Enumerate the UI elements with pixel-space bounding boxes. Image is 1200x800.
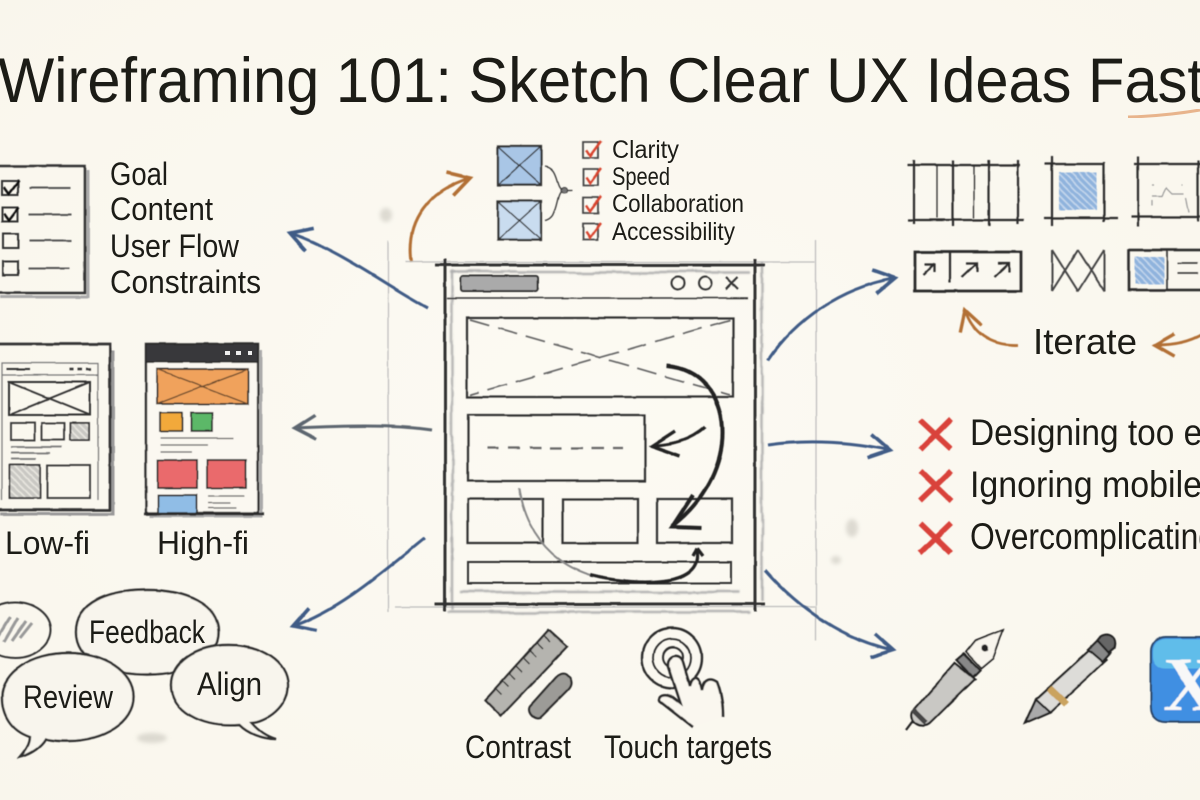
align bubble: Align xyxy=(197,666,262,702)
benefit labels: Accessibility xyxy=(612,218,735,246)
marker pen icon xyxy=(1025,635,1115,723)
touch icon xyxy=(642,628,723,727)
checklist sheet icon xyxy=(0,166,88,297)
title underline accent xyxy=(1128,110,1200,117)
arrow: to feedback xyxy=(293,538,425,626)
mistake labels xyxy=(970,412,1200,557)
smudges xyxy=(137,208,858,743)
benefits icon group xyxy=(498,136,744,246)
wireframe thumbnail icons xyxy=(498,146,572,240)
panel: touch targets xyxy=(604,628,772,765)
grid variations xyxy=(908,156,1200,291)
benefit labels: Speed xyxy=(612,163,670,191)
feedback bubble: Feedback xyxy=(89,614,206,650)
iterate arrow left xyxy=(965,310,1018,345)
footer bar placeholder xyxy=(468,562,731,583)
feedback bubble xyxy=(76,590,219,675)
benefit labels: Clarity xyxy=(612,136,679,164)
checklist labels: Goal xyxy=(110,156,168,192)
red crosses xyxy=(920,419,951,553)
panel: feedback bubbles xyxy=(0,590,288,757)
review bubble xyxy=(2,653,134,757)
arrow: to mistakes xyxy=(768,442,890,450)
panel: tools xyxy=(906,630,1200,730)
flow arrows xyxy=(519,366,723,582)
text block placeholder xyxy=(468,415,645,481)
arrow: to fidelity xyxy=(295,426,432,430)
iterate arrow right xyxy=(1155,333,1200,345)
arrow: to tools xyxy=(765,570,893,650)
card placeholders xyxy=(468,499,732,543)
title bar xyxy=(447,276,748,298)
eraser xyxy=(529,673,572,718)
panel: high-fi wireframe xyxy=(144,344,264,561)
fountain pen icon xyxy=(906,630,1003,730)
iterate label: Iterate xyxy=(1033,321,1137,362)
low-fi sketch xyxy=(0,344,113,514)
hero placeholder xyxy=(467,318,733,397)
panel: contrast xyxy=(465,630,572,765)
sketch ghost strokes xyxy=(448,262,762,612)
panel: low-fi wireframe xyxy=(0,344,113,561)
hatched bubble xyxy=(0,602,51,658)
panel: central wireframe xyxy=(388,240,816,640)
ruler icon xyxy=(485,630,572,718)
panel: goals checklist xyxy=(0,156,261,300)
low-fi label: Low-fi xyxy=(5,525,90,561)
check marks xyxy=(583,141,601,240)
arrow: to goals xyxy=(290,233,428,308)
high-fi label: High-fi xyxy=(157,525,249,561)
window dots xyxy=(225,351,252,355)
benefit labels xyxy=(612,136,744,246)
high-fi sketch xyxy=(144,344,264,516)
window frame xyxy=(435,259,765,612)
align bubble xyxy=(171,645,288,739)
checklist labels: Constraints xyxy=(110,264,261,300)
review bubble: Review xyxy=(23,679,114,715)
construction lines xyxy=(388,240,816,640)
checklist labels xyxy=(110,156,261,300)
contrast label: Contrast xyxy=(465,729,571,765)
checklist labels: User Flow xyxy=(110,228,240,264)
benefit labels: Collaboration xyxy=(612,190,744,218)
touch targets label: Touch targets xyxy=(604,729,772,765)
checklist labels: Content xyxy=(110,191,213,227)
panel: iterate variations xyxy=(908,156,1200,362)
arrow: orange to benefits xyxy=(410,178,470,262)
arrow: to iterate grid xyxy=(768,278,895,360)
panel: common mistakes xyxy=(920,412,1200,557)
